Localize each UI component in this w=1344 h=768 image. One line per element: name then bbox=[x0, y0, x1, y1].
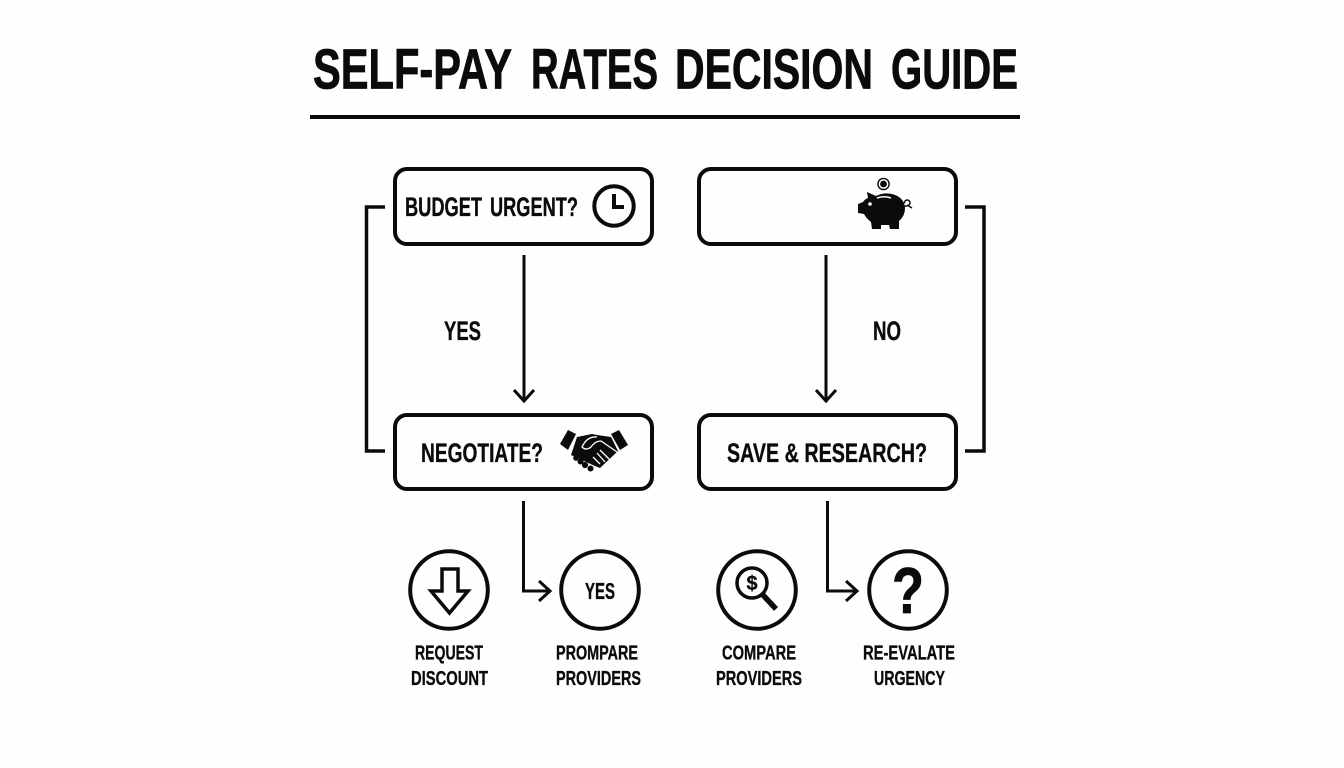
arrow: yes branch bbox=[514, 255, 534, 401]
step: re-evaluate urgency bbox=[863, 551, 955, 690]
decision box: save and research: SAVE & RESEARCH? bbox=[727, 438, 927, 468]
arrow: negotiate to yes bbox=[524, 501, 550, 601]
step: re-evaluate urgency: URGENCY bbox=[874, 667, 945, 690]
decision box: budget urgent bbox=[395, 169, 652, 244]
icon: down arrow in circle bbox=[410, 551, 488, 629]
arrow: left loop bracket bbox=[366, 207, 385, 451]
step: compare providers bbox=[716, 551, 802, 690]
step: compare providers: PROVIDERS bbox=[716, 667, 802, 690]
step: re-evaluate urgency: RE-EVALATE bbox=[863, 642, 955, 664]
decision box: piggy bank bbox=[699, 169, 956, 244]
label: yes: YES bbox=[444, 316, 481, 346]
decision box: negotiate: NEGOTIATE? bbox=[421, 438, 543, 468]
title: SELF-PAY bbox=[313, 38, 512, 102]
decision box: save and research bbox=[699, 415, 956, 489]
arrow: right loop bracket bbox=[965, 207, 984, 451]
arrow: save and research to re-evaluate bbox=[828, 501, 857, 601]
icon: yes circle: YES bbox=[585, 578, 615, 604]
label: no: NO bbox=[873, 316, 901, 346]
icon: question mark in circle: ? bbox=[892, 554, 924, 627]
title: GUIDE bbox=[891, 38, 1018, 102]
step: compare providers: COMPARE bbox=[722, 642, 796, 664]
title: RATES bbox=[531, 38, 658, 102]
step: yes outcome: PROVIDERS bbox=[556, 667, 641, 690]
icon: clock bbox=[594, 186, 634, 226]
icon: piggy bank bbox=[858, 178, 912, 229]
step: yes outcome: PROMPARE bbox=[556, 642, 638, 664]
arrow: no branch bbox=[816, 255, 836, 401]
decision box: budget urgent: URGENT? bbox=[490, 192, 578, 222]
title: DECISION bbox=[675, 38, 873, 102]
icon: magnifying glass with dollar: $ bbox=[746, 573, 758, 595]
decision box: negotiate bbox=[395, 415, 652, 489]
step: request discount: DISCOUNT bbox=[411, 667, 488, 690]
title bbox=[310, 38, 1020, 119]
step: yes outcome bbox=[556, 551, 641, 690]
step: request discount: REQUEST bbox=[415, 642, 483, 664]
step: request discount bbox=[410, 551, 488, 690]
decision box: budget urgent: BUDGET bbox=[405, 192, 482, 222]
icon: handshake bbox=[560, 430, 628, 472]
